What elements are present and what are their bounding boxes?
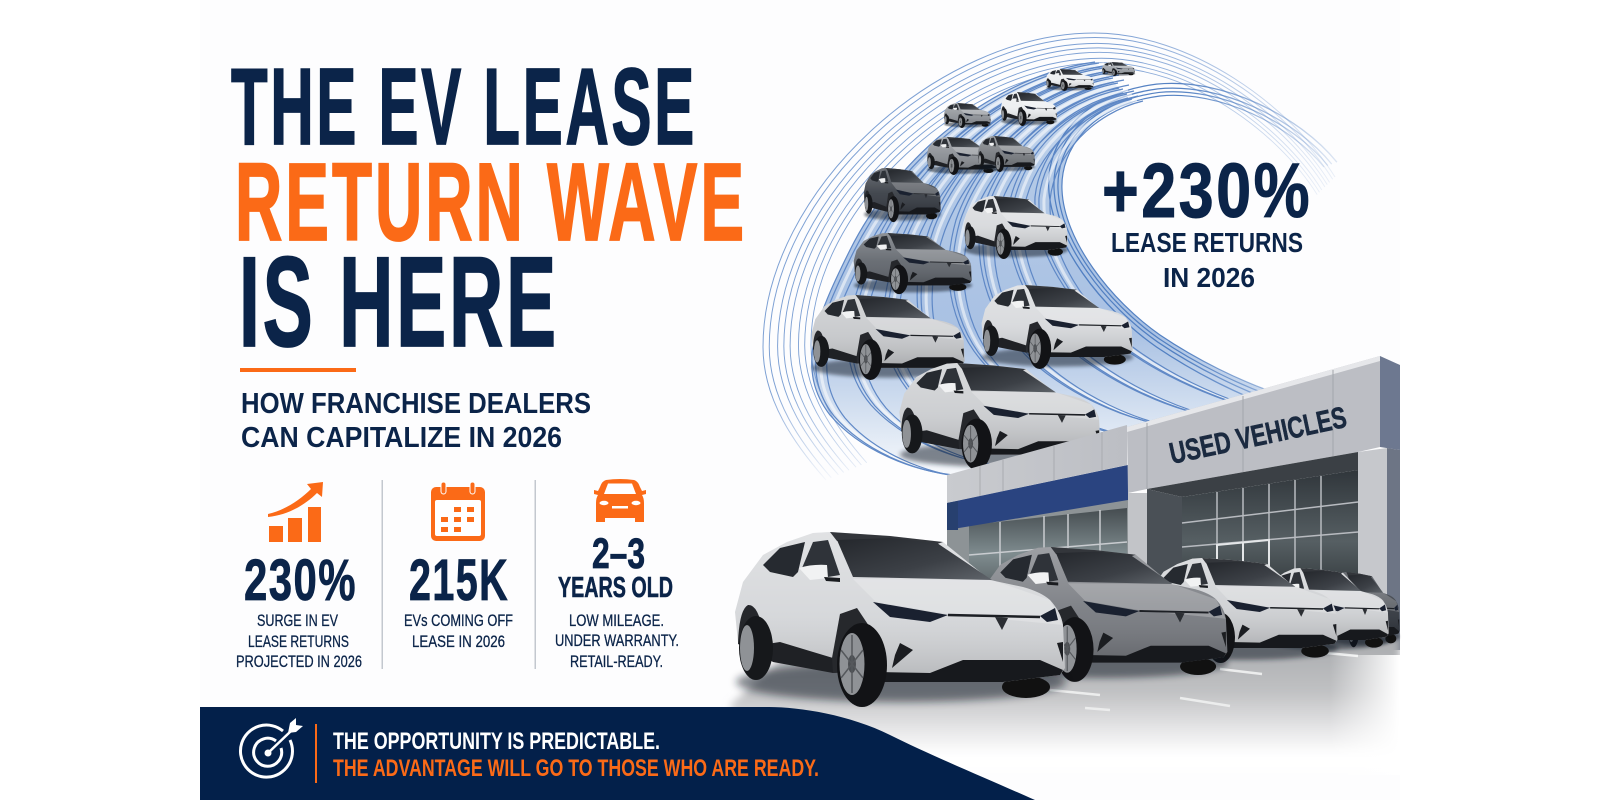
- stat description: PROJECTED IN 2026: [236, 652, 362, 671]
- main glass: [1182, 470, 1358, 600]
- parking lot ground: [730, 635, 1400, 775]
- callout: +230% lease returns: IN 2026: [1163, 262, 1255, 293]
- car B grey: [979, 547, 1228, 682]
- wave of returning cars: [812, 62, 1135, 470]
- car 9: [854, 233, 972, 294]
- car 2: [1046, 69, 1094, 91]
- stat value: 215K: [409, 548, 509, 613]
- blue band: [947, 465, 1128, 530]
- title: RETURN WAVE: [235, 141, 747, 264]
- lower left wing: [947, 465, 1128, 600]
- stat: 2-3 years old: [555, 479, 679, 671]
- subtitle: CAN CAPITALIZE IN 2026: [241, 422, 562, 454]
- car 4: [944, 103, 991, 128]
- banner text: THE OPPORTUNITY IS PREDICTABLE.: [333, 728, 660, 755]
- stat: 230% surge: [236, 482, 362, 671]
- car 11: [812, 295, 965, 380]
- car D silver: [1265, 568, 1389, 652]
- stat description: SURGE IN EV: [257, 611, 338, 630]
- dealership row of cars: [735, 532, 1400, 707]
- stat description: [555, 611, 679, 671]
- subtitle: [241, 388, 591, 454]
- callout: +230% lease returns: [1102, 148, 1312, 293]
- car 1: [1102, 62, 1135, 76]
- title: [231, 46, 747, 374]
- swirling wave of lines: [763, 33, 1337, 480]
- icon: rising bar chart: [268, 482, 323, 542]
- right block side: [1380, 356, 1400, 450]
- left recess and pillar: [1128, 493, 1147, 603]
- stat description: RETAIL-READY.: [570, 652, 663, 671]
- background panel: [200, 0, 1400, 800]
- sign: used vehicles: USED VEHICLES: [1167, 401, 1350, 471]
- car 10: [982, 285, 1133, 369]
- stat: 215K EVs: [404, 482, 513, 651]
- stat description: LEASE IN 2026: [412, 632, 505, 651]
- banner text: [333, 728, 819, 782]
- banner text: THE ADVANTAGE WILL GO TO THOSE WHO ARE READY.: [333, 755, 819, 782]
- title: IS HERE: [239, 231, 559, 374]
- soffit: [1147, 452, 1358, 497]
- car C silver: [1147, 558, 1338, 663]
- icon: car front: [594, 479, 646, 522]
- stat description: [236, 611, 362, 671]
- car 12: [899, 363, 1101, 470]
- car 8: [964, 196, 1068, 259]
- left wing glass: [969, 508, 1127, 600]
- banner divider: [315, 724, 317, 783]
- car 3: [1001, 92, 1057, 126]
- subtitle: HOW FRANCHISE DEALERS: [241, 388, 591, 420]
- accent rule: [240, 368, 356, 372]
- stat description: [404, 611, 513, 651]
- car 7: [864, 168, 941, 222]
- stat value: 2–3: [592, 530, 645, 578]
- stat description: EVs COMING OFF: [404, 611, 513, 630]
- stat description: UNDER WARRANTY.: [555, 631, 679, 650]
- title: THE EV LEASE: [231, 46, 697, 168]
- stat description: LOW MILEAGE.: [569, 611, 664, 630]
- stat value: 230%: [244, 548, 357, 613]
- stat: 2-3 years old: YEARS OLD: [558, 572, 673, 604]
- icon: target with arrow: [240, 718, 303, 777]
- stat description: LEASE RETURNS: [248, 632, 349, 651]
- right block fascia: [1127, 356, 1380, 493]
- car A silver: [735, 532, 1066, 707]
- callout: +230% lease returns: +230%: [1102, 148, 1312, 234]
- dealership building: [947, 356, 1400, 650]
- car 6: [978, 136, 1035, 172]
- car E dark: [1325, 572, 1400, 647]
- callout: +230% lease returns: LEASE RETURNS: [1111, 227, 1303, 258]
- bottom banner: [200, 707, 1035, 800]
- left wing fascia: [947, 425, 1127, 503]
- car 5: [927, 137, 997, 175]
- icon: calendar: [431, 482, 485, 541]
- doors: [1217, 540, 1269, 600]
- right pillar: [1358, 448, 1387, 650]
